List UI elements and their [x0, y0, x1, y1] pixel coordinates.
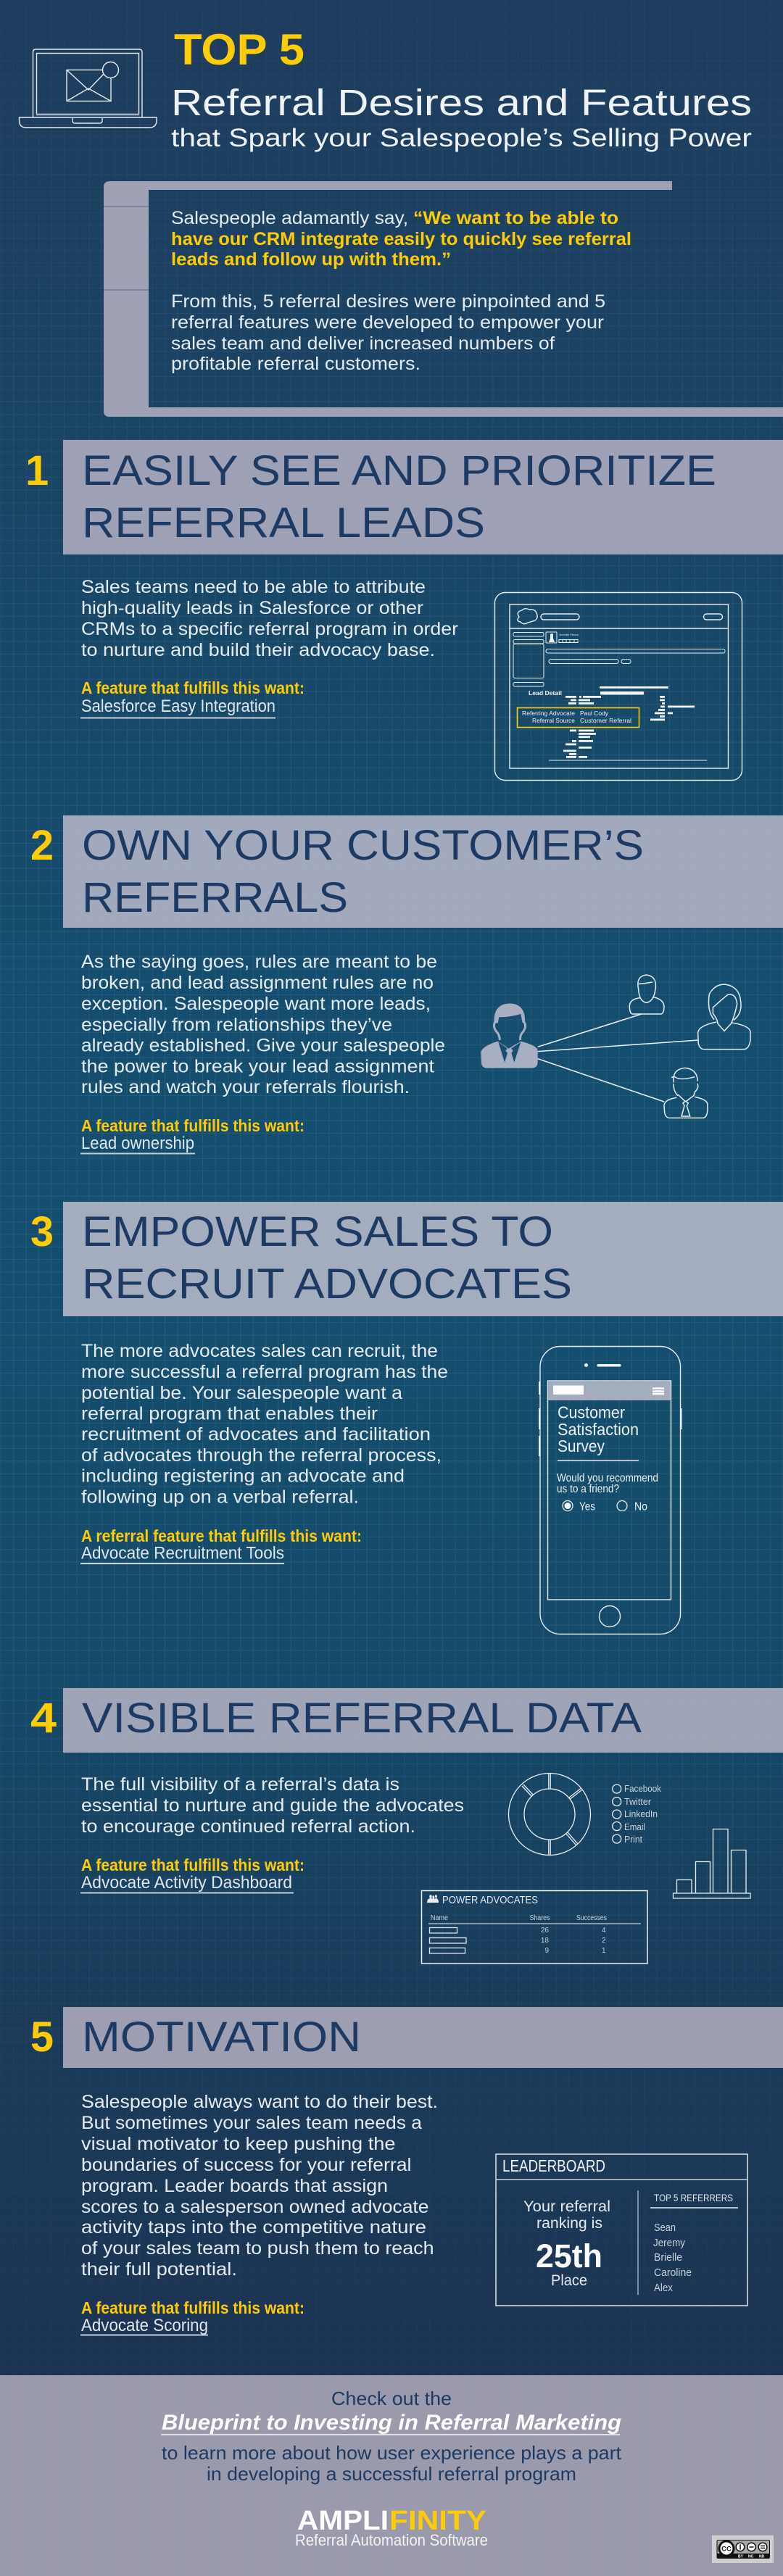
leaderboard: 25th [536, 2238, 602, 2274]
table: power advocates: 4 [602, 1927, 606, 1935]
table: power advocates: Successes [576, 1914, 607, 1922]
table: power advocates: POWER ADVOCATES [442, 1894, 538, 1906]
feature callout: section 5 [80, 2298, 304, 2335]
heading: section 2 [30, 815, 783, 928]
leaderboard: Place [551, 2272, 587, 2289]
leaderboard: LEADERBOARD [502, 2156, 605, 2175]
text block: section 1 body: Sales teams need to be able to attribute [81, 577, 426, 597]
icon: phone with survey [539, 1347, 682, 1634]
heading: section 3: EMPOWER SALES TO [82, 1208, 553, 1255]
feature callout: section 2 [80, 1116, 304, 1154]
icon: phone with survey: Survey [558, 1437, 605, 1455]
text block: section 1 body: to nurture and build their advocacy base. [81, 640, 435, 660]
table: power advocates: 18 [541, 1937, 549, 1945]
chart legend: share channels: LinkedIn [624, 1809, 658, 1819]
heading: section 1 [25, 440, 783, 554]
table: power advocates: Shares [529, 1914, 550, 1922]
text block: intro quote: leads and follow up with them.” [171, 249, 451, 270]
feature callout: section 3: A referral feature that fulfills this want: [81, 1526, 362, 1545]
text block: section 3 body: of advocates through the referral process, [81, 1445, 442, 1466]
chart legend: share channels: Twitter [624, 1797, 651, 1807]
title: sub line: that Spark your Salespeople’s Selling Power [171, 124, 752, 152]
text block: section 2 body: especially from relationships they’ve [81, 1015, 392, 1035]
icon: phone with survey: Satisfaction [558, 1420, 639, 1439]
feature callout: section 3: Advocate Recruitment Tools [81, 1544, 284, 1563]
feature callout: section 4: A feature that fulfills this want: [81, 1856, 304, 1874]
icon: tablet with Salesforce lead detail: Jennifer Peters [559, 633, 579, 636]
text block: section 4 body [81, 1774, 464, 1837]
chart legend: share channels: Print [624, 1835, 643, 1845]
badge: creative commons: ND [759, 2554, 765, 2559]
text block: intro quote: Salespeople adamantly say, [171, 208, 408, 228]
heading: section 3 [30, 1202, 783, 1316]
section 2 [30, 815, 783, 1154]
footer: call to action text: Check out the [331, 2388, 452, 2409]
table: power advocates: 2 [602, 1937, 606, 1945]
text block: section 5 body: Salespeople always want to do their best. [81, 2092, 438, 2112]
panel: intro bracket [104, 181, 783, 417]
text block: section 1 body [81, 577, 458, 660]
table: power advocates: 26 [541, 1927, 549, 1935]
leaderboard: Your referral [523, 2198, 610, 2215]
heading: section 3: RECRUIT ADVOCATES [82, 1260, 572, 1308]
text block: section 5 body: their full potential. [81, 2259, 237, 2280]
heading: section 1: REFERRAL LEADS [82, 499, 485, 547]
title: top 5: TOP 5 [174, 25, 304, 74]
footer: call to action text: to learn more about how user experience plays a part [162, 2442, 622, 2464]
logo: Amplifinity [295, 2506, 488, 2549]
section 5 [30, 2007, 783, 2335]
heading: section 3: 3 [30, 1208, 54, 1255]
text block: intro description: sales team and deliver increased numbers of [171, 333, 555, 354]
icon: contact woman [698, 984, 750, 1050]
section 1 [25, 440, 783, 780]
heading: section 2: OWN YOUR CUSTOMER’S [82, 822, 644, 869]
footer panel [0, 2375, 783, 2576]
section 4 [30, 1688, 783, 1964]
heading: section 5: 5 [30, 2014, 54, 2061]
text block: section 4 body: The full visibility of a referral’s data is [81, 1774, 399, 1795]
text block: section 5 body: of your sales team to push them to reach [81, 2238, 434, 2259]
text block: section 2 body: broken, and lead assignment rules are no [81, 973, 434, 993]
text block: intro quote [171, 208, 631, 270]
icon: tablet with Salesforce lead detail: Referring Advocate [522, 710, 576, 717]
text block: section 5 body: visual motivator to keep pushing the [81, 2134, 396, 2154]
badge: creative commons: NC [748, 2554, 754, 2559]
feature callout: section 1: Salesforce Easy Integration [81, 697, 276, 716]
table: power advocates: 1 [602, 1947, 606, 1955]
chart legend: share channels: Facebook [624, 1784, 662, 1794]
text block: intro description: referral features were developed to empower your [171, 312, 604, 333]
icon: tablet with Salesforce lead detail [494, 593, 742, 780]
leaderboard: Sean [654, 2222, 676, 2234]
text block: section 2 body: rules and watch your referrals flourish. [81, 1077, 410, 1097]
icon: tablet with Salesforce lead detail: Customer Referral [580, 718, 631, 724]
text block: section 4 body: essential to nurture and guide the advocates [81, 1795, 464, 1816]
footer: call to action text [161, 2388, 622, 2485]
text block: section 3 body: including registering an advocate and [81, 1466, 405, 1486]
text block: intro description: From this, 5 referral desires were pinpointed and 5 [171, 291, 605, 312]
heading: section 4 [30, 1688, 783, 1753]
table: power advocates [422, 1890, 647, 1964]
heading: section 1: EASILY SEE AND PRIORITIZE [82, 447, 716, 494]
badge: creative commons: BY [738, 2554, 744, 2559]
heading: section 4: 4 [30, 1695, 57, 1742]
footer: call to action text: Blueprint to Investing in Referral Marketing [162, 2411, 621, 2435]
chart legend: share channels: Email [624, 1822, 645, 1832]
heading: section 5: MOTIVATION [82, 2014, 361, 2061]
text block: section 2 body: As the saying goes, rules are meant to be [81, 952, 437, 972]
table: power advocates: 9 [544, 1947, 549, 1955]
feature callout: section 1: A feature that fulfills this want: [81, 678, 304, 697]
chart: donut [509, 1773, 590, 1856]
heading: section 2: 2 [30, 822, 54, 869]
text block: section 3 body: The more advocates sales can recruit, the [81, 1341, 438, 1361]
logo: Amplifinity: Referral Automation Software [295, 2531, 488, 2549]
badge: creative commons: CC [721, 2546, 732, 2553]
icon: tablet with Salesforce lead detail: Referral Source [532, 718, 576, 724]
title: main line: Referral Desires and Features [171, 82, 752, 123]
table: power advocates: Name [431, 1914, 448, 1922]
text block: intro description [171, 291, 605, 374]
icon: tablet with Salesforce lead detail: Lead Detail [529, 689, 562, 697]
icon: phone with survey: Customer [558, 1403, 625, 1422]
leaderboard: Jeremy [653, 2237, 685, 2249]
heading: section 1: 1 [25, 447, 49, 494]
text block: section 3 body: potential be. Your salespeople want a [81, 1383, 402, 1403]
icon: connection lines [537, 1014, 698, 1102]
text block: section 5 body: boundaries of success for your referral [81, 2155, 412, 2175]
title [171, 25, 752, 152]
leaderboard: ranking is [536, 2215, 602, 2232]
badge: creative commons [712, 2535, 774, 2563]
text block: section 1 body: CRMs to a specific referral program in order [81, 619, 458, 639]
icon: phone with survey: Would you recommend [557, 1472, 658, 1484]
feature callout: section 3 [80, 1526, 362, 1564]
feature callout: section 2: A feature that fulfills this want: [81, 1116, 304, 1135]
heading: section 4: VISIBLE REFERRAL DATA [82, 1695, 642, 1742]
text block: section 3 body: recruitment of advocates and facilitation [81, 1424, 431, 1445]
footer: call to action text: in developing a successful referral program [207, 2463, 576, 2485]
text block: section 2 body: already established. Give your salespeople [81, 1035, 445, 1055]
text block: section 3 body: referral program that enables their [81, 1403, 378, 1424]
icon: phone with survey: Yes [579, 1500, 595, 1513]
icon: salesperson [481, 1003, 538, 1068]
feature callout: section 4: Advocate Activity Dashboard [81, 1873, 292, 1892]
text block: section 1 body: high-quality leads in Salesforce or other [81, 598, 423, 618]
feature callout: section 2: Lead ownership [81, 1134, 194, 1153]
text block: section 2 body [81, 952, 445, 1097]
text block: intro description: profitable referral customers. [171, 354, 420, 374]
chart: bars [673, 1829, 750, 1898]
leaderboard: TOP 5 REFERRERS [654, 2192, 733, 2203]
icon: phone with survey: No [634, 1500, 647, 1513]
text block: intro quote: “We want to be able to [413, 208, 618, 228]
icon: laptop with envelope [19, 49, 157, 128]
text block: section 5 body [81, 2092, 438, 2280]
icon: salesperson connected to contacts [481, 975, 750, 1118]
text block: section 5 body: activity taps into the competitive nature [81, 2217, 426, 2238]
text block: intro quote: have our CRM integrate easily to quickly see referral [171, 229, 631, 249]
heading: section 2: REFERRALS [82, 874, 348, 921]
leaderboard: Brielle [654, 2251, 682, 2264]
text block: section 5 body: program. Leader boards that assign [81, 2176, 388, 2196]
feature callout: section 1 [80, 678, 304, 719]
leaderboard: Caroline [654, 2267, 692, 2279]
text block: section 5 body: But sometimes your sales team needs a [81, 2113, 422, 2133]
text block: section 3 body: more successful a referral program has the [81, 1362, 448, 1382]
logo: Amplifinity: FINITY [389, 2506, 486, 2536]
feature callout: section 4 [80, 1856, 304, 1893]
logo: Amplifinity: AMPLI [297, 2506, 389, 2536]
text block: section 3 body [81, 1341, 448, 1508]
section 3 [30, 1202, 783, 1634]
text block: section 2 body: exception. Salespeople want more leads, [81, 994, 431, 1014]
text block: section 3 body: following up on a verbal referral. [81, 1487, 359, 1508]
leaderboard: Alex [654, 2282, 673, 2294]
feature callout: section 5: Advocate Scoring [81, 2316, 208, 2335]
icon: tablet with Salesforce lead detail: Paul Cody [580, 710, 608, 717]
text block: section 5 body: scores to a salesperson owned advocate [81, 2197, 429, 2217]
feature callout: section 5: A feature that fulfills this want: [81, 2298, 304, 2317]
heading: section 5 [30, 2007, 783, 2068]
text block: section 4 body: to encourage continued referral action. [81, 1816, 415, 1837]
leaderboard [496, 2154, 747, 2306]
icon: phone with survey: us to a friend? [557, 1483, 619, 1495]
icon: contact man [629, 975, 664, 1014]
icon: contact man with tie [664, 1068, 708, 1118]
text block: section 2 body: the power to break your lead assignment [81, 1057, 434, 1077]
chart legend: share channels [613, 1784, 662, 1845]
